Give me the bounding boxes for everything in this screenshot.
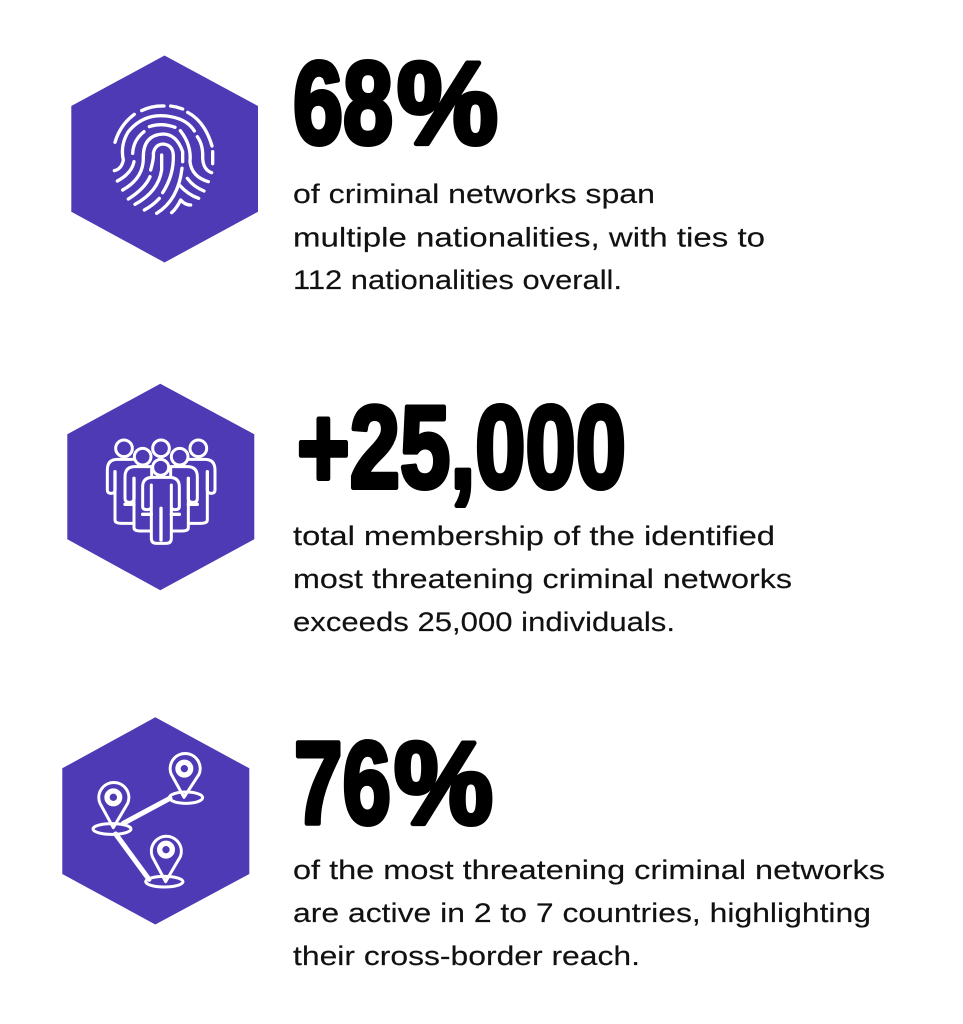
panel: nationalities stat [71, 38, 765, 295]
text: countries description: are active in 2 to 7 countries, highlighting [293, 898, 871, 928]
stat: +25,000: +25,000 [297, 382, 626, 512]
text: countries description: of the most threatening criminal networks [293, 855, 885, 885]
icon: hexagon with group of people [67, 384, 254, 590]
stat: 68%: 68 [293, 38, 393, 168]
stat: 76%: % [394, 718, 493, 848]
icon: hexagon with connected map pins [62, 717, 249, 924]
text: membership description [293, 521, 792, 637]
stat: 76%: 76 [294, 718, 391, 848]
text: nationalities description: of criminal networks span [293, 179, 655, 209]
text: membership description: most threatening criminal networks [293, 564, 792, 594]
panel: countries stat [62, 717, 885, 971]
text: nationalities description: multiple nationalities, with ties to [293, 222, 765, 252]
text: nationalities description: 112 nationalities overall. [293, 265, 622, 295]
stat: 68%: % [397, 38, 498, 168]
panel: membership stat [67, 382, 792, 637]
icon: hexagon with fingerprint [71, 56, 258, 262]
text: countries description: their cross-border reach. [293, 941, 640, 971]
text: membership description: exceeds 25,000 individuals. [293, 607, 675, 637]
text: countries description [293, 855, 885, 971]
text: membership description: total membership of the identified [293, 521, 775, 551]
text: nationalities description [293, 179, 765, 295]
